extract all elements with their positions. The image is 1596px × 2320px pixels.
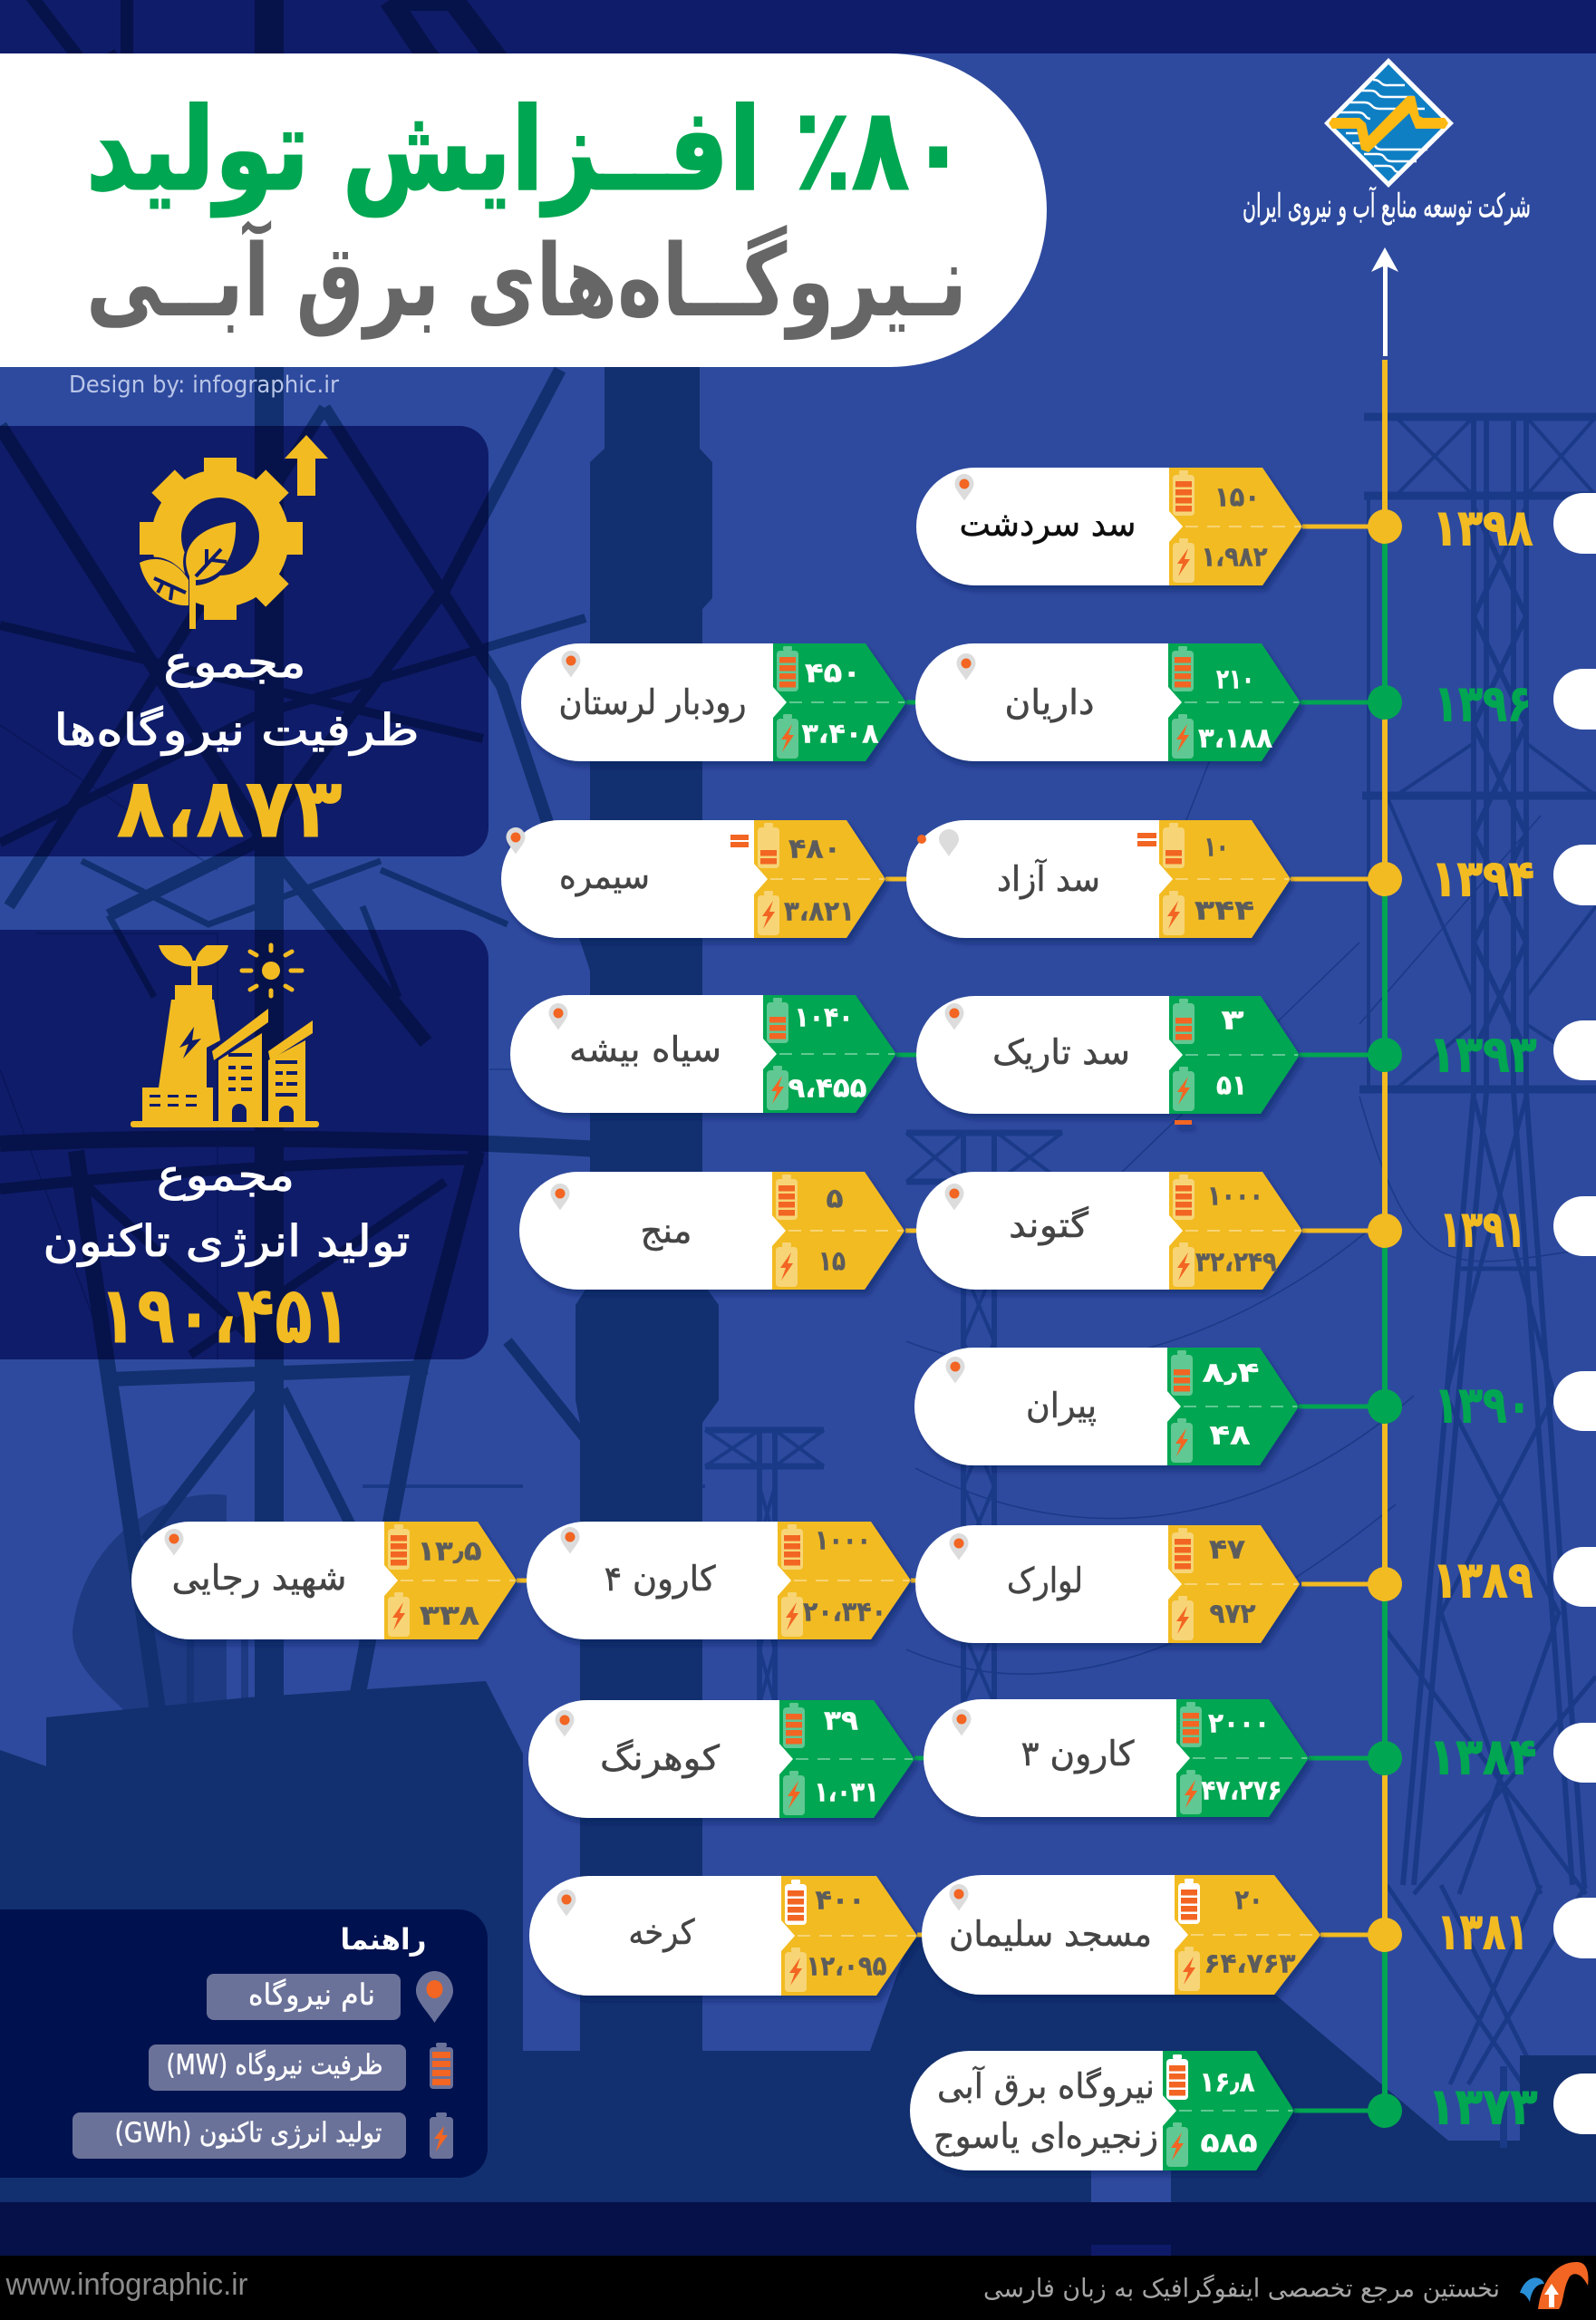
footer logo <box>1520 2262 1588 2309</box>
card: نیروگاه برق آبی زنجیره‌ای یاسوج <box>910 2051 1294 2170</box>
title line 2: نـیروگــاه‌های برق آبــی <box>86 219 967 340</box>
top dark band <box>0 0 1596 53</box>
card: سد تاریک: ۵۱ <box>1216 1069 1247 1102</box>
card: لوارک: ۹۷۲ <box>1209 1599 1256 1629</box>
mid towers <box>363 1133 1062 1812</box>
title banner <box>0 53 1047 367</box>
panel heading: مجموع <box>163 637 306 688</box>
year labels: ۱۳۹۸ <box>1432 498 1533 558</box>
card: سد تاریک: سد تاریک <box>992 1032 1130 1072</box>
card: کارون ۴: کارون ۴ <box>604 1559 716 1600</box>
footer url: www.infographic.ir <box>5 2267 247 2302</box>
legend heading: راهنما <box>341 1922 426 1957</box>
year labels: ۱۳۸۹ <box>1432 1552 1533 1610</box>
card: پیران <box>914 1348 1299 1465</box>
panel subheading: ظرفیت نیروگاه‌ها <box>54 705 419 756</box>
card: لوارک: لوارک <box>1007 1561 1083 1601</box>
card: سد آزاد: ۳۴۴ <box>1195 895 1254 926</box>
card: داریان: ۳،۱۸۸ <box>1198 723 1272 754</box>
card: کوهرنگ: ۱،۰۳۱ <box>814 1776 879 1809</box>
card: نیروگاه برق آبی زنجیره‌ای یاسوج: زنجیره‌ای یاسوج <box>933 2116 1158 2157</box>
card: سد سردشت: ۱۵۰ <box>1214 482 1260 513</box>
card: سد سردشت <box>916 468 1302 585</box>
card: سد سردشت: ۱،۹۸۲ <box>1202 542 1267 573</box>
logo pulse <box>1329 96 1448 152</box>
card: رودبار لرستان: ۴۵۰ <box>805 658 861 689</box>
footer bar <box>0 2256 1596 2320</box>
card: کارون ۴ <box>527 1522 911 1639</box>
design credit: Design by: infographic.ir <box>69 372 339 399</box>
card: کارون ۳: ۲۰۰۰ <box>1208 1707 1270 1740</box>
year labels: ۱۳۹۳ <box>1428 1026 1537 1084</box>
card: داریان <box>915 643 1301 761</box>
card: شهید رجایی: ۱۳٫۵ <box>417 1535 482 1568</box>
card: مسجد سلیمان: ۲۰ <box>1234 1885 1263 1916</box>
total capacity value: ۸،۸۷۳ <box>116 759 343 857</box>
icon: gear with leaves and arrow <box>136 435 328 629</box>
card: سیمره <box>501 820 885 938</box>
card: داریان: ۲۱۰ <box>1216 663 1254 696</box>
card: گتوند: ۱۰۰۰ <box>1207 1180 1263 1213</box>
total generation value: ۱۹۰،۴۵۱ <box>99 1269 351 1361</box>
card: کارون ۳: ۴۷،۲۷۶ <box>1202 1774 1282 1807</box>
card: سیاه بیشه: سیاه بیشه <box>569 1030 721 1069</box>
card: داریان: داریان <box>1004 682 1095 722</box>
card: کارون ۳: کارون ۳ <box>1020 1734 1135 1774</box>
panel: total capacity <box>0 426 488 857</box>
left big tower <box>0 0 653 2257</box>
title line 1: ٪۸۰ افــزایش تولید <box>86 83 967 218</box>
year labels: ۱۳۹۰ <box>1434 1376 1532 1436</box>
card: پیران: پیران <box>1026 1386 1097 1426</box>
card: سد آزاد: سد آزاد <box>997 858 1100 899</box>
card: گتوند: گتوند <box>1009 1205 1089 1246</box>
year labels: ۱۳۸۱ <box>1437 1903 1528 1961</box>
card: منج: منج <box>640 1211 692 1252</box>
card: لوارک <box>915 1525 1300 1643</box>
year labels: ۱۳۸۴ <box>1428 1727 1537 1787</box>
card: پیران: ۴۸ <box>1209 1419 1251 1452</box>
year labels: ۱۳۹۶ <box>1434 674 1532 734</box>
card: کارون ۴: ۲۰،۳۴۰ <box>803 1597 886 1628</box>
panel: total generation <box>0 930 488 1361</box>
card: گتوند <box>916 1172 1302 1290</box>
legend item: capacity: ظرفیت نیروگاه (MW) <box>167 2050 382 2081</box>
legend item: plant name: نام نیروگاه <box>248 1977 375 2012</box>
card: نیروگاه برق آبی زنجیره‌ای یاسوج: نیروگاه برق آبی <box>937 2065 1155 2107</box>
card: منج: ۵ <box>827 1184 843 1214</box>
card: کرخه <box>529 1876 917 1996</box>
card: کرخه: ۴۰۰ <box>816 1885 865 1916</box>
icon: power plant and solar <box>131 945 319 1127</box>
card: شهید رجایی <box>131 1522 517 1639</box>
card: شهید رجایی: شهید رجایی <box>172 1558 346 1599</box>
footer tagline: نخستین مرجع تخصصی اینفوگرافیک به زبان فارسی <box>983 2273 1500 2304</box>
card: سیمره: سیمره <box>559 856 650 897</box>
card: کارون ۳ <box>924 1699 1309 1817</box>
central chimney <box>576 54 719 2066</box>
legend item: generation: تولید انرژی تاکنون (GWh) <box>114 2117 382 2150</box>
card: سد سردشت: سد سردشت <box>959 504 1137 545</box>
card: کرخه: کرخه <box>629 1912 695 1953</box>
card: سیمره: ۳،۸۲۱ <box>784 895 855 928</box>
panel subheading: تولید انرژی تاکنون <box>44 1216 410 1267</box>
connectors <box>517 527 1385 2111</box>
card: نیروگاه برق آبی زنجیره‌ای یاسوج: ۱۶٫۸ <box>1200 2066 1254 2099</box>
card: کوهرنگ <box>528 1700 914 1818</box>
card: مسجد سلیمان: ۶۴،۷۶۳ <box>1204 1948 1296 1979</box>
bottom dark band <box>0 2202 1596 2257</box>
card: سیمره: ۴۸۰ <box>788 834 841 865</box>
card: رودبار لرستان: رودبار لرستان <box>558 682 747 723</box>
card: سد تاریک: ۳ <box>1222 1004 1243 1037</box>
logo: water resources company <box>1324 58 1454 188</box>
card: شهید رجایی: ۳۳۸ <box>420 1600 479 1631</box>
card: پیران: ۸٫۴ <box>1202 1358 1260 1388</box>
year labels: ۱۳۹۱ <box>1439 1200 1526 1260</box>
card: مسجد سلیمان <box>922 1875 1320 1995</box>
card: کرخه: ۱۲،۰۹۵ <box>807 1950 886 1983</box>
timeline spine <box>1382 360 1388 2111</box>
legend item: generation <box>73 2112 453 2159</box>
year tabs at right edge <box>1553 493 1596 2134</box>
right tower <box>1359 417 1596 2084</box>
card: نیروگاه برق آبی زنجیره‌ای یاسوج: ۵۸۵ <box>1200 2128 1258 2159</box>
card: کوهرنگ: ۳۹ <box>824 1706 858 1736</box>
panel heading: مجموع <box>157 1150 295 1201</box>
card: منج <box>519 1172 904 1290</box>
legend item: plant name <box>207 1971 453 2023</box>
legend item: capacity <box>149 2043 453 2091</box>
card: سد آزاد: ۱۰ <box>1204 832 1229 863</box>
city silhouette <box>0 1681 1596 2320</box>
card: رودبار لرستان: ۳،۴۰۸ <box>801 718 879 750</box>
arrow: timeline head <box>1371 247 1398 356</box>
card: سیاه بیشه: ۱۰۴۰ <box>794 1002 854 1033</box>
year labels: ۱۳۹۴ <box>1431 850 1534 908</box>
card: لوارک: ۴۷ <box>1209 1533 1245 1566</box>
card: رودبار لرستان <box>521 643 906 761</box>
card: سد آزاد <box>906 820 1291 938</box>
card: گتوند: ۳۲،۲۴۹ <box>1195 1247 1277 1278</box>
card: سد تاریک <box>916 996 1300 1125</box>
card: کوهرنگ: کوهرنگ <box>600 1738 721 1779</box>
panel: legend <box>0 1909 488 2178</box>
card: کارون ۴: ۱۰۰۰ <box>815 1524 871 1557</box>
card: منج: ۱۵ <box>818 1245 846 1278</box>
year labels <box>1428 498 1537 2137</box>
card: سیاه بیشه: ۹،۴۵۵ <box>788 1073 866 1104</box>
card: مسجد سلیمان: مسجد سلیمان <box>949 1914 1152 1954</box>
year labels: ۱۳۷۳ <box>1428 2077 1537 2137</box>
timeline nodes <box>1368 509 1402 2128</box>
card: سیاه بیشه <box>510 995 896 1113</box>
